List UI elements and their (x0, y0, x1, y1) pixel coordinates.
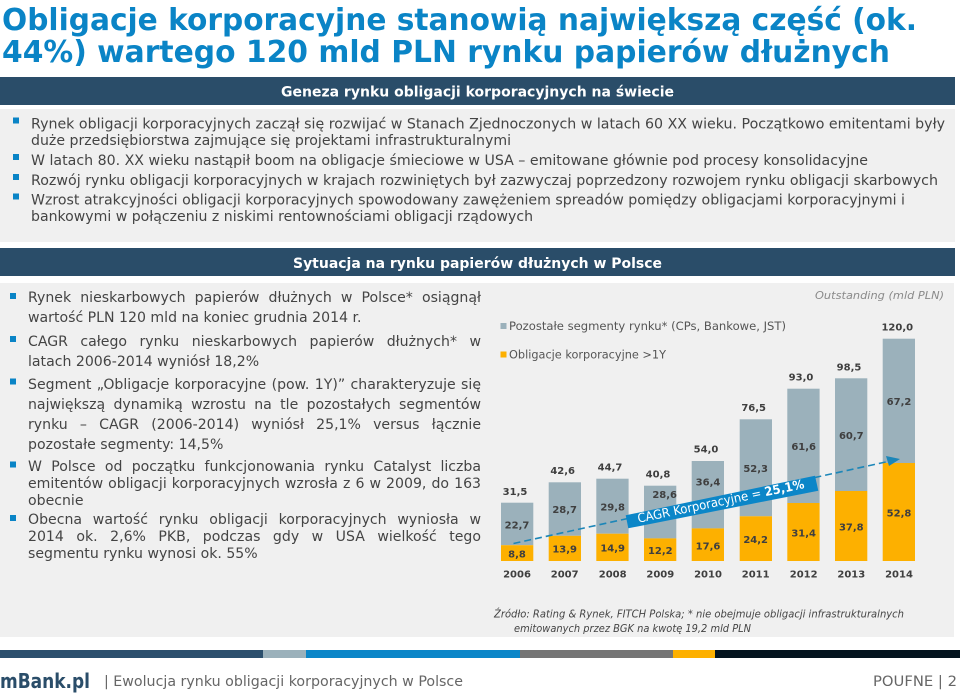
year axis labels: 2013 (837, 570, 865, 581)
total values: 44,7 (598, 463, 622, 474)
year axis labels: 2011 (742, 570, 770, 581)
text block: geneza bullets: Rozwój rynku obligacji korporacyjnych w krajach rozwiniętych był zazwyczaj poprzedzony rozwojem rynku obligacji skarbowych (31, 173, 938, 189)
grey segment values: 28,7 (552, 505, 577, 516)
legend: Pozostałe segmenty rynku* (CPs, Bankowe, JST) (509, 319, 786, 333)
orange segment values: 24,2 (743, 535, 768, 546)
text block: sytuacja bullets: latach 2006-2014 wyniósł 18,2% (28, 354, 259, 370)
legend (500, 319, 786, 362)
title: 44%) wartego 120 mld PLN rynku papierów dłużnych (2, 35, 890, 70)
orange segment values: 31,4 (791, 528, 816, 539)
grey segment values: 67,2 (887, 397, 911, 408)
text block: sytuacja bullets: 2014 ok. 2,6% PKB, podczas gdy w USA wielkość tego (28, 529, 481, 545)
text block: geneza bullets (13, 116, 945, 225)
heading: sytuacja (0, 248, 955, 276)
grey bar segments (501, 339, 915, 545)
grey segment values (505, 397, 911, 531)
grey segment values: 22,7 (505, 520, 529, 531)
chart: outstanding stacked bars (500, 289, 944, 581)
arrow: CAGR trend (514, 456, 900, 544)
year axis labels: 2010 (694, 570, 722, 581)
text block: sytuacja bullets: emitentów obligacji korporacyjnych wzrosła z 6 w 2009, do 163 (28, 476, 481, 492)
text block: sytuacja bullets: segmentu rynku wynosi ok. 55% (28, 546, 258, 562)
orange segment values: 37,8 (839, 523, 864, 534)
text block: geneza bullets: W latach 80. XX wieku nastąpił boom na obligacje śmieciowe w USA – emitowane głównie pod procesy konsolidacyjne (31, 153, 868, 169)
text block: geneza bullets: Rynek obligacji korporacyjnych zaczął się rozwijać w Stanach Zjednoczonych w latach 60 XX wieku. Początkowo emitentami były (31, 116, 945, 132)
heading: sytuacja: Sytuacja na rynku papierów dłużnych w Polsce (293, 256, 662, 272)
bullet markers: sytuacja (10, 293, 16, 521)
orange segment values (508, 508, 911, 560)
text block: sytuacja bullets: pozostałe segmenty: 14,5% (28, 437, 223, 453)
orange segment values: 14,9 (600, 544, 625, 555)
grey segment values: 28,6 (652, 490, 677, 501)
text block: sytuacja bullets (28, 290, 481, 562)
source note: Źródło: Rating & Rynek, FITCH Polska; * nie obejmuje obligacji infrastrukturalnych (493, 608, 904, 621)
legend: Obligacje korporacyjne >1Y (509, 348, 667, 362)
footer logo: mBank.pl (0, 669, 90, 693)
total values: 98,5 (837, 362, 861, 373)
orange segment values: 12,2 (648, 546, 673, 557)
total values: 93,0 (789, 372, 813, 383)
year axis labels: 2009 (646, 570, 674, 581)
text block: geneza bullets: Wzrost atrakcyjności obligacji korporacyjnych spowodowany zawężeniem spreadów pomiędzy obligacjami korporacyjnymi i (31, 192, 905, 208)
total values: 31,5 (503, 487, 527, 498)
year axis labels: 2008 (599, 570, 627, 581)
grey segment values: 52,3 (743, 464, 768, 475)
heading: geneza (0, 77, 955, 105)
total values: 42,6 (550, 466, 575, 477)
text block: sytuacja bullets: CAGR całego rynku nieskarbowych papierów dłużnych* w (28, 334, 481, 350)
total values: 120,0 (881, 322, 913, 333)
chart unit label: Outstanding (mld PLN) (815, 289, 944, 302)
year axis labels: 2007 (551, 570, 579, 581)
text block: sytuacja bullets: Segment „Obligacje korporacyjne (pow. 1Y)” charakteryzuje się (28, 377, 481, 393)
text block: sytuacja bullets: W Polsce od początku funkcjonowania rynku Catalyst liczba (28, 459, 481, 475)
year axis labels: 2014 (885, 570, 913, 581)
grey segment values: 36,4 (696, 477, 720, 488)
panel: sytuacja background (0, 283, 954, 637)
title: Obligacje korporacyjne stanowią największą część (ok. (2, 3, 917, 38)
heading: geneza: Geneza rynku obligacji korporacyjnych na świecie (281, 84, 674, 100)
text block: sytuacja bullets: wartość PLN 120 mld na koniec grudnia 2014 r. (28, 310, 362, 326)
grey segment values: 29,8 (600, 502, 625, 513)
footer page marker: POUFNE | 2 (873, 674, 957, 690)
orange segment values: 17,6 (696, 541, 720, 552)
year axis labels (503, 570, 913, 581)
total values: 54,0 (694, 445, 718, 456)
source note: emitowanych przez BGK na kwotę 19,2 mld PLN (514, 622, 751, 635)
grey segment values: 61,6 (791, 442, 816, 453)
text block: sytuacja bullets: rynku – CAGR (2006-2014) wyniósł 25,1% versus łącznie (28, 417, 481, 433)
orange segment values: 52,8 (887, 508, 911, 519)
year axis labels: 2006 (503, 570, 531, 581)
text block: geneza bullets: duże przedsiębiorstwa zajmujące się projektami infrastrukturalnymi (31, 133, 511, 149)
text block: sytuacja bullets: obecnie (28, 493, 84, 509)
callout: CAGR banner: CAGR Korporacyjne = 25,1% (636, 476, 806, 526)
panel: geneza background (0, 109, 955, 242)
source note (493, 608, 904, 635)
grey segment values: 60,7 (839, 431, 864, 442)
total values (503, 322, 913, 498)
title (2, 3, 917, 70)
orange bar segments (501, 463, 915, 561)
text block: geneza bullets: bankowymi w połączeniu z niskimi rentownościami obligacji rządowych (31, 209, 533, 225)
text block: sytuacja bullets: największą dynamiką wzrostu na tle pozostałych segmentów (28, 397, 481, 413)
text block: sytuacja bullets: Obecna wartość rynku obligacji korporacyjnych wyniosła w (28, 512, 481, 528)
total values: 76,5 (741, 403, 766, 414)
year axis labels: 2012 (790, 570, 818, 581)
footer colour strip (0, 650, 960, 658)
orange segment values: 8,8 (508, 549, 526, 560)
text block: sytuacja bullets: Rynek nieskarbowych papierów dłużnych w Polsce* osiągnął (28, 290, 481, 306)
total values: 40,8 (646, 469, 670, 480)
orange segment values: 13,9 (552, 545, 577, 556)
footer caption: | Ewolucja rynku obligacji korporacyjnych w Polsce (104, 674, 463, 690)
